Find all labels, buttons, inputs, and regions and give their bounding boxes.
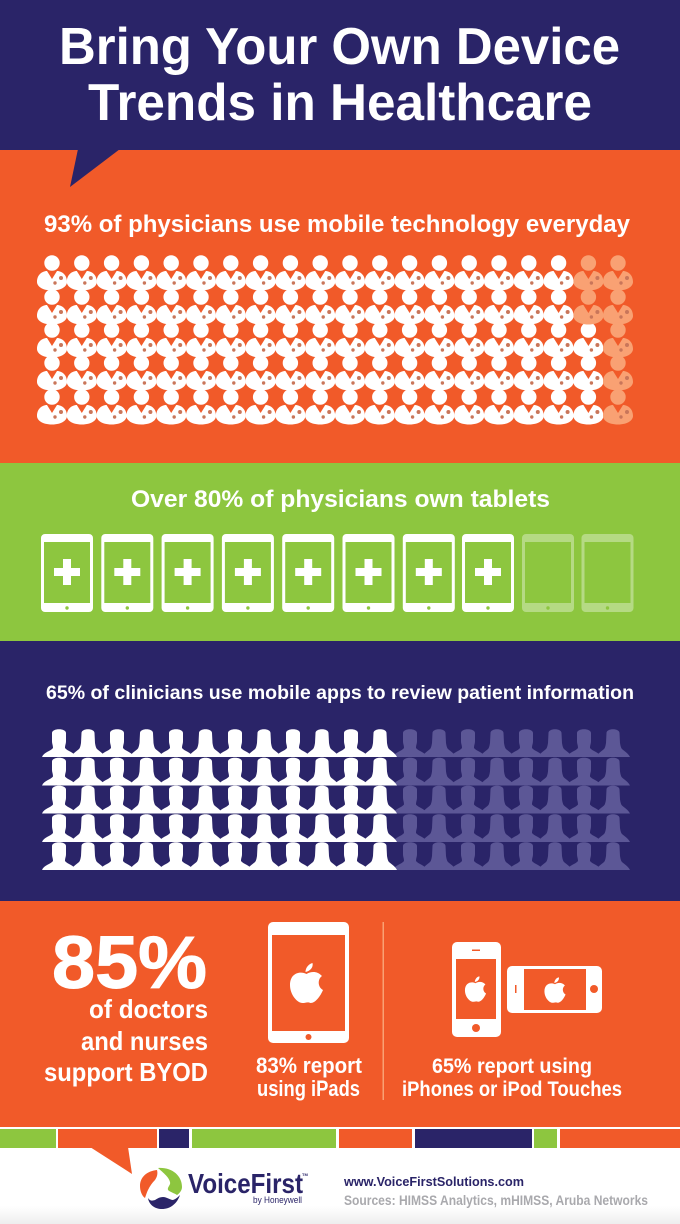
heading: 93%: 93% of physicians use mobile technology everyday xyxy=(44,211,631,238)
heading: 65%: 65% of clinicians use mobile apps to review patient information xyxy=(46,682,634,704)
logo mark xyxy=(140,1168,182,1209)
logo wordmark: TM xyxy=(302,1172,308,1177)
title xyxy=(59,18,620,132)
sources: Sources: HIMSS Analytics, mHIMSS, Aruba Networks xyxy=(344,1193,648,1208)
icon: iPad xyxy=(268,922,349,1043)
text: iPads xyxy=(256,1053,363,1101)
text: doctors and nurses: support BYOD xyxy=(44,1057,208,1087)
panel: physicians mobile technology xyxy=(0,150,680,463)
pictogram: clinicians xyxy=(42,729,630,870)
text: iPhones: iPhones or iPod Touches xyxy=(402,1078,622,1101)
text: doctors and nurses: and nurses xyxy=(81,1026,208,1056)
logo wordmark: by Honeywell xyxy=(253,1195,302,1205)
colour strip xyxy=(0,1129,680,1148)
panel: tablets xyxy=(0,463,680,641)
logo: VoiceFirst xyxy=(140,1168,308,1209)
text: iPhones xyxy=(402,1055,622,1101)
speech bubble tail: footer xyxy=(90,1147,132,1174)
footer fade xyxy=(0,1206,680,1224)
divider xyxy=(382,922,384,1100)
icon: iPhone portrait xyxy=(452,942,501,1037)
big number: 85%: 85% xyxy=(52,921,207,1004)
pictogram: physicians xyxy=(37,255,633,424)
title: Trends in Healthcare xyxy=(88,74,592,132)
text: doctors and nurses: of doctors xyxy=(89,994,208,1024)
panel: BYOD support xyxy=(0,901,680,1127)
title: Bring Your Own Device xyxy=(59,18,620,76)
text: doctors and nurses xyxy=(44,994,208,1087)
website: www.VoiceFirstSolutions.com xyxy=(343,1174,524,1189)
panel: clinicians apps xyxy=(0,641,680,901)
logo wordmark: VoiceFirst xyxy=(188,1168,303,1199)
pictogram: tablets xyxy=(41,534,634,612)
panel: header xyxy=(0,0,680,150)
speech bubble tail: header xyxy=(70,149,120,187)
text: iPads: 83% report xyxy=(256,1053,363,1078)
heading: 80%: Over 80% of physicians own tablets xyxy=(131,486,550,513)
text: iPhones: 65% report using xyxy=(432,1055,592,1078)
text: iPads: using iPads xyxy=(257,1076,360,1101)
icon: iPhone landscape xyxy=(507,966,602,1013)
